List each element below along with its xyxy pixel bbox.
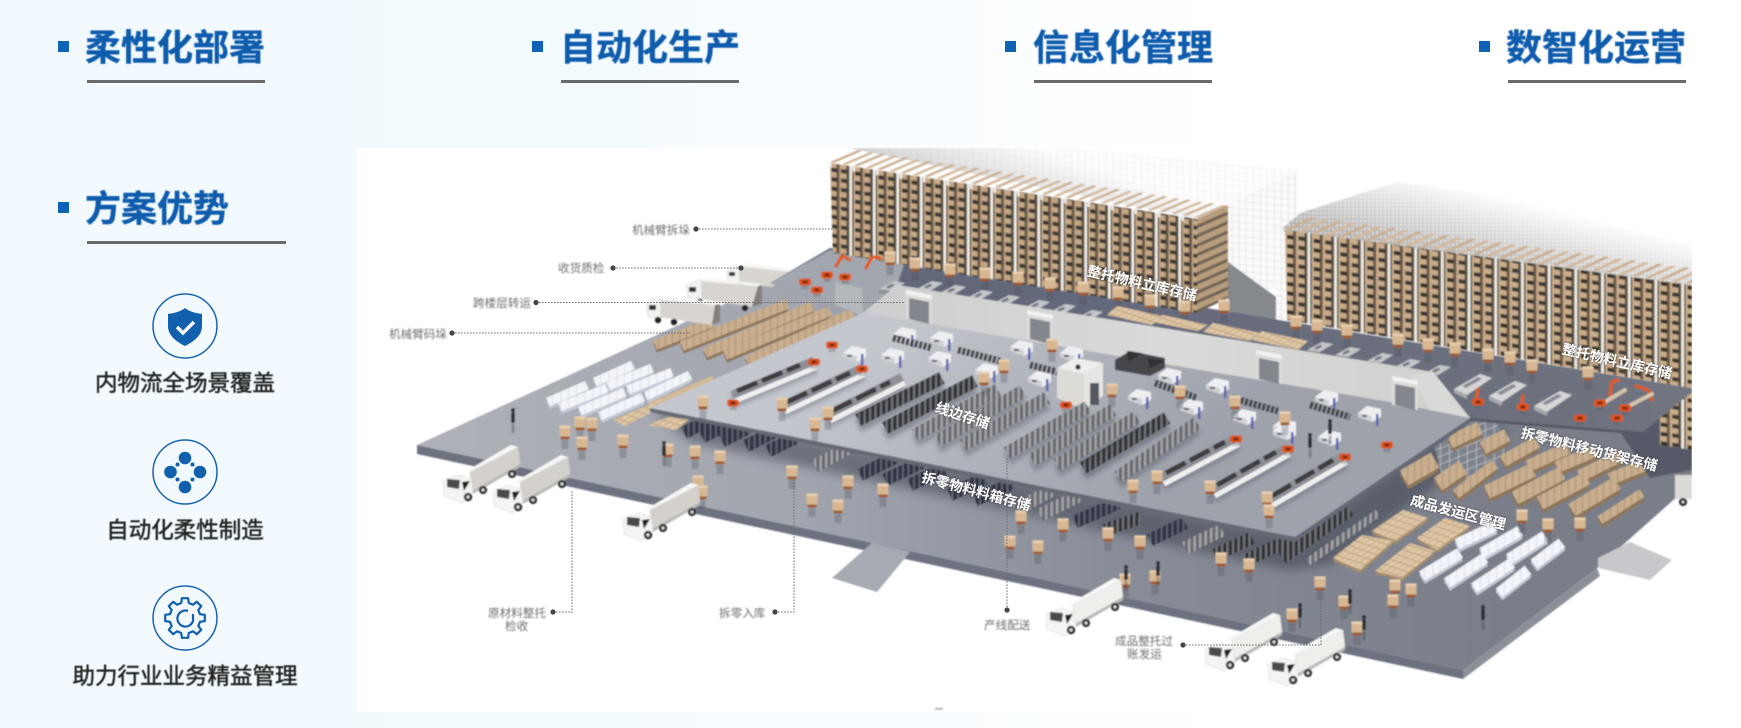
carton feet along racks [884, 252, 1594, 390]
under-mezzanine storage shelves [684, 418, 1378, 562]
zone labels: 整托物料立库存储 [1086, 263, 1198, 304]
AGVs [799, 272, 1631, 425]
mezzanine AGVs and orange units [698, 338, 1393, 528]
zone labels: 整托物料立库存储 [1561, 341, 1673, 382]
finished goods: tan pallets [1333, 510, 1470, 578]
finished goods: white pallets [1422, 526, 1562, 593]
zone labels: 拆零物料料箱存储 [920, 469, 1032, 513]
tall rack 1 [829, 150, 1228, 313]
heading: 方案优势 [58, 188, 286, 244]
heading: 柔性化部署 [58, 27, 265, 83]
icon: shield check [152, 293, 218, 359]
callout labels: 拆零入库 [719, 606, 766, 620]
dark line-side shelves [858, 378, 1167, 468]
pallet rows: white goods left [548, 365, 690, 416]
text: 助力行业业务精益管理: 助力行业业务精益管理 [72, 664, 298, 689]
zone labels: 成品发运区管理 [1409, 492, 1508, 533]
callout labels: 账发运 [1127, 647, 1162, 661]
tall rack 2 [1285, 217, 1730, 388]
back wall [863, 285, 1470, 418]
machine-side short shelves [893, 338, 1350, 417]
cropped truck at right edge [1675, 475, 1692, 506]
ramp: front [832, 543, 910, 592]
callout labels: 检收 [505, 619, 529, 633]
under-mezzanine shadow [650, 408, 1510, 570]
heading: 信息化管理: 信息化管理 [1033, 27, 1213, 68]
heading: 数智化运营: 数智化运营 [1506, 27, 1686, 68]
callout labels: 成品整托过 [1115, 634, 1173, 648]
zone labels [920, 263, 1673, 533]
heading: 柔性化部署: 柔性化部署 [85, 27, 265, 68]
heading: 自动化生产 [532, 27, 740, 83]
callout labels: 收货质检 [558, 261, 605, 275]
callout labels: 机械臂码垛 [389, 327, 447, 341]
picking stations behind wall [879, 281, 1572, 416]
icon: gear [152, 585, 218, 651]
pallet rows: raw material area [655, 304, 853, 361]
bottom small mark [935, 708, 943, 710]
ghost racks [850, 148, 1692, 330]
moving-rack storage: tan rows [1404, 428, 1650, 520]
callout dots [449, 226, 1186, 648]
mezzanine floor [650, 313, 1470, 542]
raised platform behind wall [770, 248, 1692, 478]
callout labels: 跨楼层转运 [473, 296, 531, 310]
callout labels [389, 223, 1173, 661]
heading: 自动化生产: 自动化生产 [560, 27, 740, 68]
callout labels: 原材料整托 [488, 606, 546, 620]
black pallet block [1115, 351, 1165, 376]
heading: 信息化管理 [1005, 27, 1214, 83]
icon: four connected dots [152, 439, 218, 505]
heading: 数智化运营 [1479, 27, 1686, 83]
CNC machines [843, 327, 1381, 450]
loose cartons: left [613, 378, 713, 430]
callout lines [452, 229, 1321, 645]
text: 自动化柔性制造: 自动化柔性制造 [106, 518, 264, 543]
zone labels: 线边存储 [933, 399, 992, 432]
image panel: white backdrop [357, 148, 1741, 712]
heading: 方案优势: 方案优势 [85, 188, 229, 229]
callout labels: 机械臂拆垛 [632, 223, 690, 237]
robot arms and orange AGVs on platform [836, 256, 1652, 408]
central building [1057, 358, 1103, 412]
warehouse isometric scene [388, 148, 1692, 710]
zone labels: 拆零物料移动货架存储 [1519, 424, 1659, 474]
ground floor slab [417, 283, 1692, 679]
AGV cartons on ground floor [511, 408, 1586, 645]
front trucks with grey trailers [443, 445, 700, 541]
grey line-side shelves [915, 390, 1197, 477]
assembly conveyors [733, 363, 1347, 507]
moving-rack storage: scaffold [1434, 420, 1504, 480]
pallet groups behind wall [1107, 306, 1308, 350]
front trucks with white trailers [1046, 578, 1345, 686]
ramp: right [1598, 542, 1672, 580]
callout labels: 产线配送 [984, 618, 1031, 632]
back trucks [646, 263, 796, 325]
text: 内物流全场景覆盖: 内物流全场景覆盖 [95, 371, 275, 396]
